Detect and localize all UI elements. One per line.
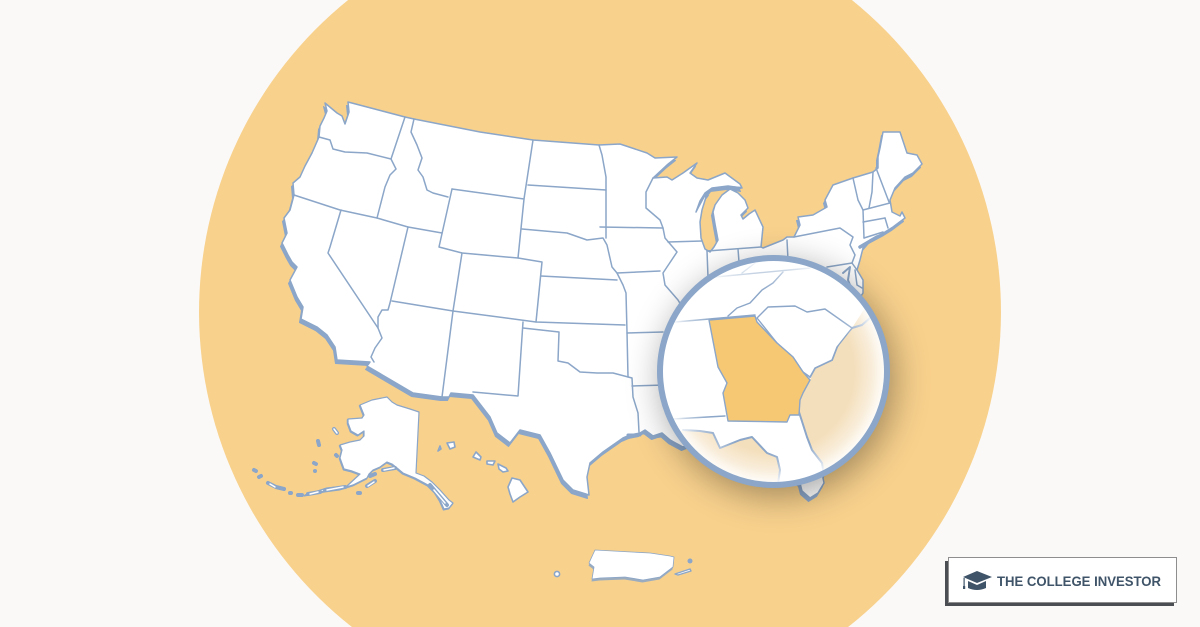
background circle [199, 0, 1001, 627]
state borders in lens [673, 263, 810, 419]
magnifying lens [660, 258, 900, 490]
logo box [948, 558, 1176, 602]
lens background [660, 258, 886, 484]
Alaska [254, 397, 453, 510]
magnifying lens shadow [662, 264, 894, 496]
Puerto Rico [554, 550, 692, 582]
state highlight: Georgia [709, 316, 810, 422]
Hawaii [438, 442, 528, 502]
map of the United States [254, 102, 922, 582]
contiguous states [280, 102, 922, 502]
logo shadow [945, 561, 1174, 606]
lens ring [660, 258, 887, 485]
Puerto Rico islands [675, 569, 691, 575]
South Carolina [757, 306, 852, 377]
Alaskan islands [254, 429, 447, 505]
gulf water [681, 430, 779, 482]
coastlines in lens [683, 318, 870, 484]
icon: graduation cap [963, 571, 992, 590]
brand name: THE COLLEGE INVESTOR [997, 573, 1161, 589]
atlantic water [800, 310, 884, 469]
lens contents [674, 262, 884, 482]
logo badge [945, 558, 1176, 606]
lens edge glow [662, 260, 886, 484]
